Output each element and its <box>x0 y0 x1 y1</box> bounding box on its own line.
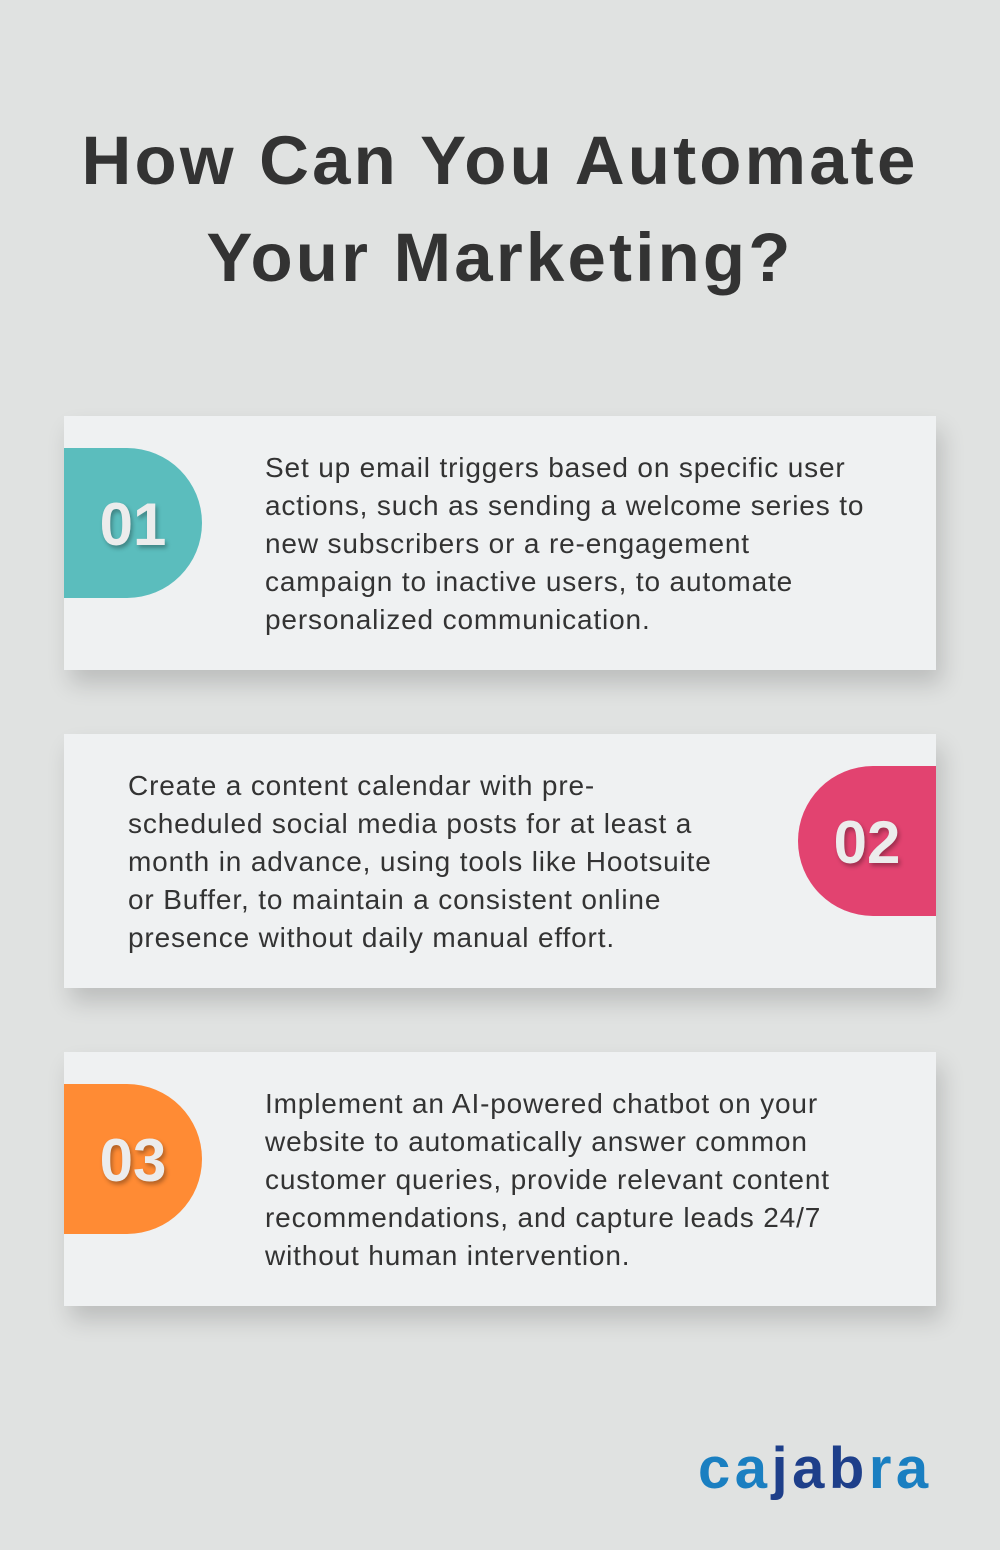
text: step 3: customer queries, provide relevant content <box>265 1164 830 1195</box>
badge: 02 <box>798 766 936 916</box>
text: step 1: campaign to inactive users, to automate <box>265 566 793 597</box>
text: step 2: Create a content calendar with pre- <box>128 770 595 801</box>
title: Your Marketing? <box>206 219 794 296</box>
text: step 3: recommendations, and capture leads 24/7 <box>265 1202 821 1233</box>
text: step 2: month in advance, using tools like Hootsuite <box>128 846 712 877</box>
text: step 2: or Buffer, to maintain a consistent online <box>128 884 661 915</box>
badge: 01: 01 <box>100 491 166 558</box>
text: step 3: Implement an AI-powered chatbot on your <box>265 1088 818 1119</box>
logo: cajabra: cajabra <box>698 1436 933 1501</box>
title: How Can You Automate <box>81 122 919 199</box>
text: step 3: website to automatically answer common <box>265 1126 808 1157</box>
text: step 1: Set up email triggers based on specific user <box>265 452 846 483</box>
title <box>81 122 919 296</box>
badge: 03: 03 <box>100 1127 166 1194</box>
text: step 2: scheduled social media posts for at least a <box>128 808 692 839</box>
text: step 2: presence without daily manual effort. <box>128 922 615 953</box>
text: step 2 <box>128 770 712 953</box>
text: step 1 <box>265 452 864 635</box>
panel: step 1 <box>64 416 936 670</box>
panel: step 2 <box>64 734 936 988</box>
text: step 3: without human intervention. <box>265 1240 630 1271</box>
text: step 1: new subscribers or a re-engagement <box>265 528 750 559</box>
badge: 03 <box>64 1084 202 1234</box>
panel: step 3 <box>64 1052 936 1306</box>
text: step 1: personalized communication. <box>265 604 651 635</box>
text: step 3 <box>265 1088 830 1271</box>
text: step 1: actions, such as sending a welcome series to <box>265 490 864 521</box>
badge: 02: 02 <box>834 809 900 876</box>
badge: 01 <box>64 448 202 598</box>
